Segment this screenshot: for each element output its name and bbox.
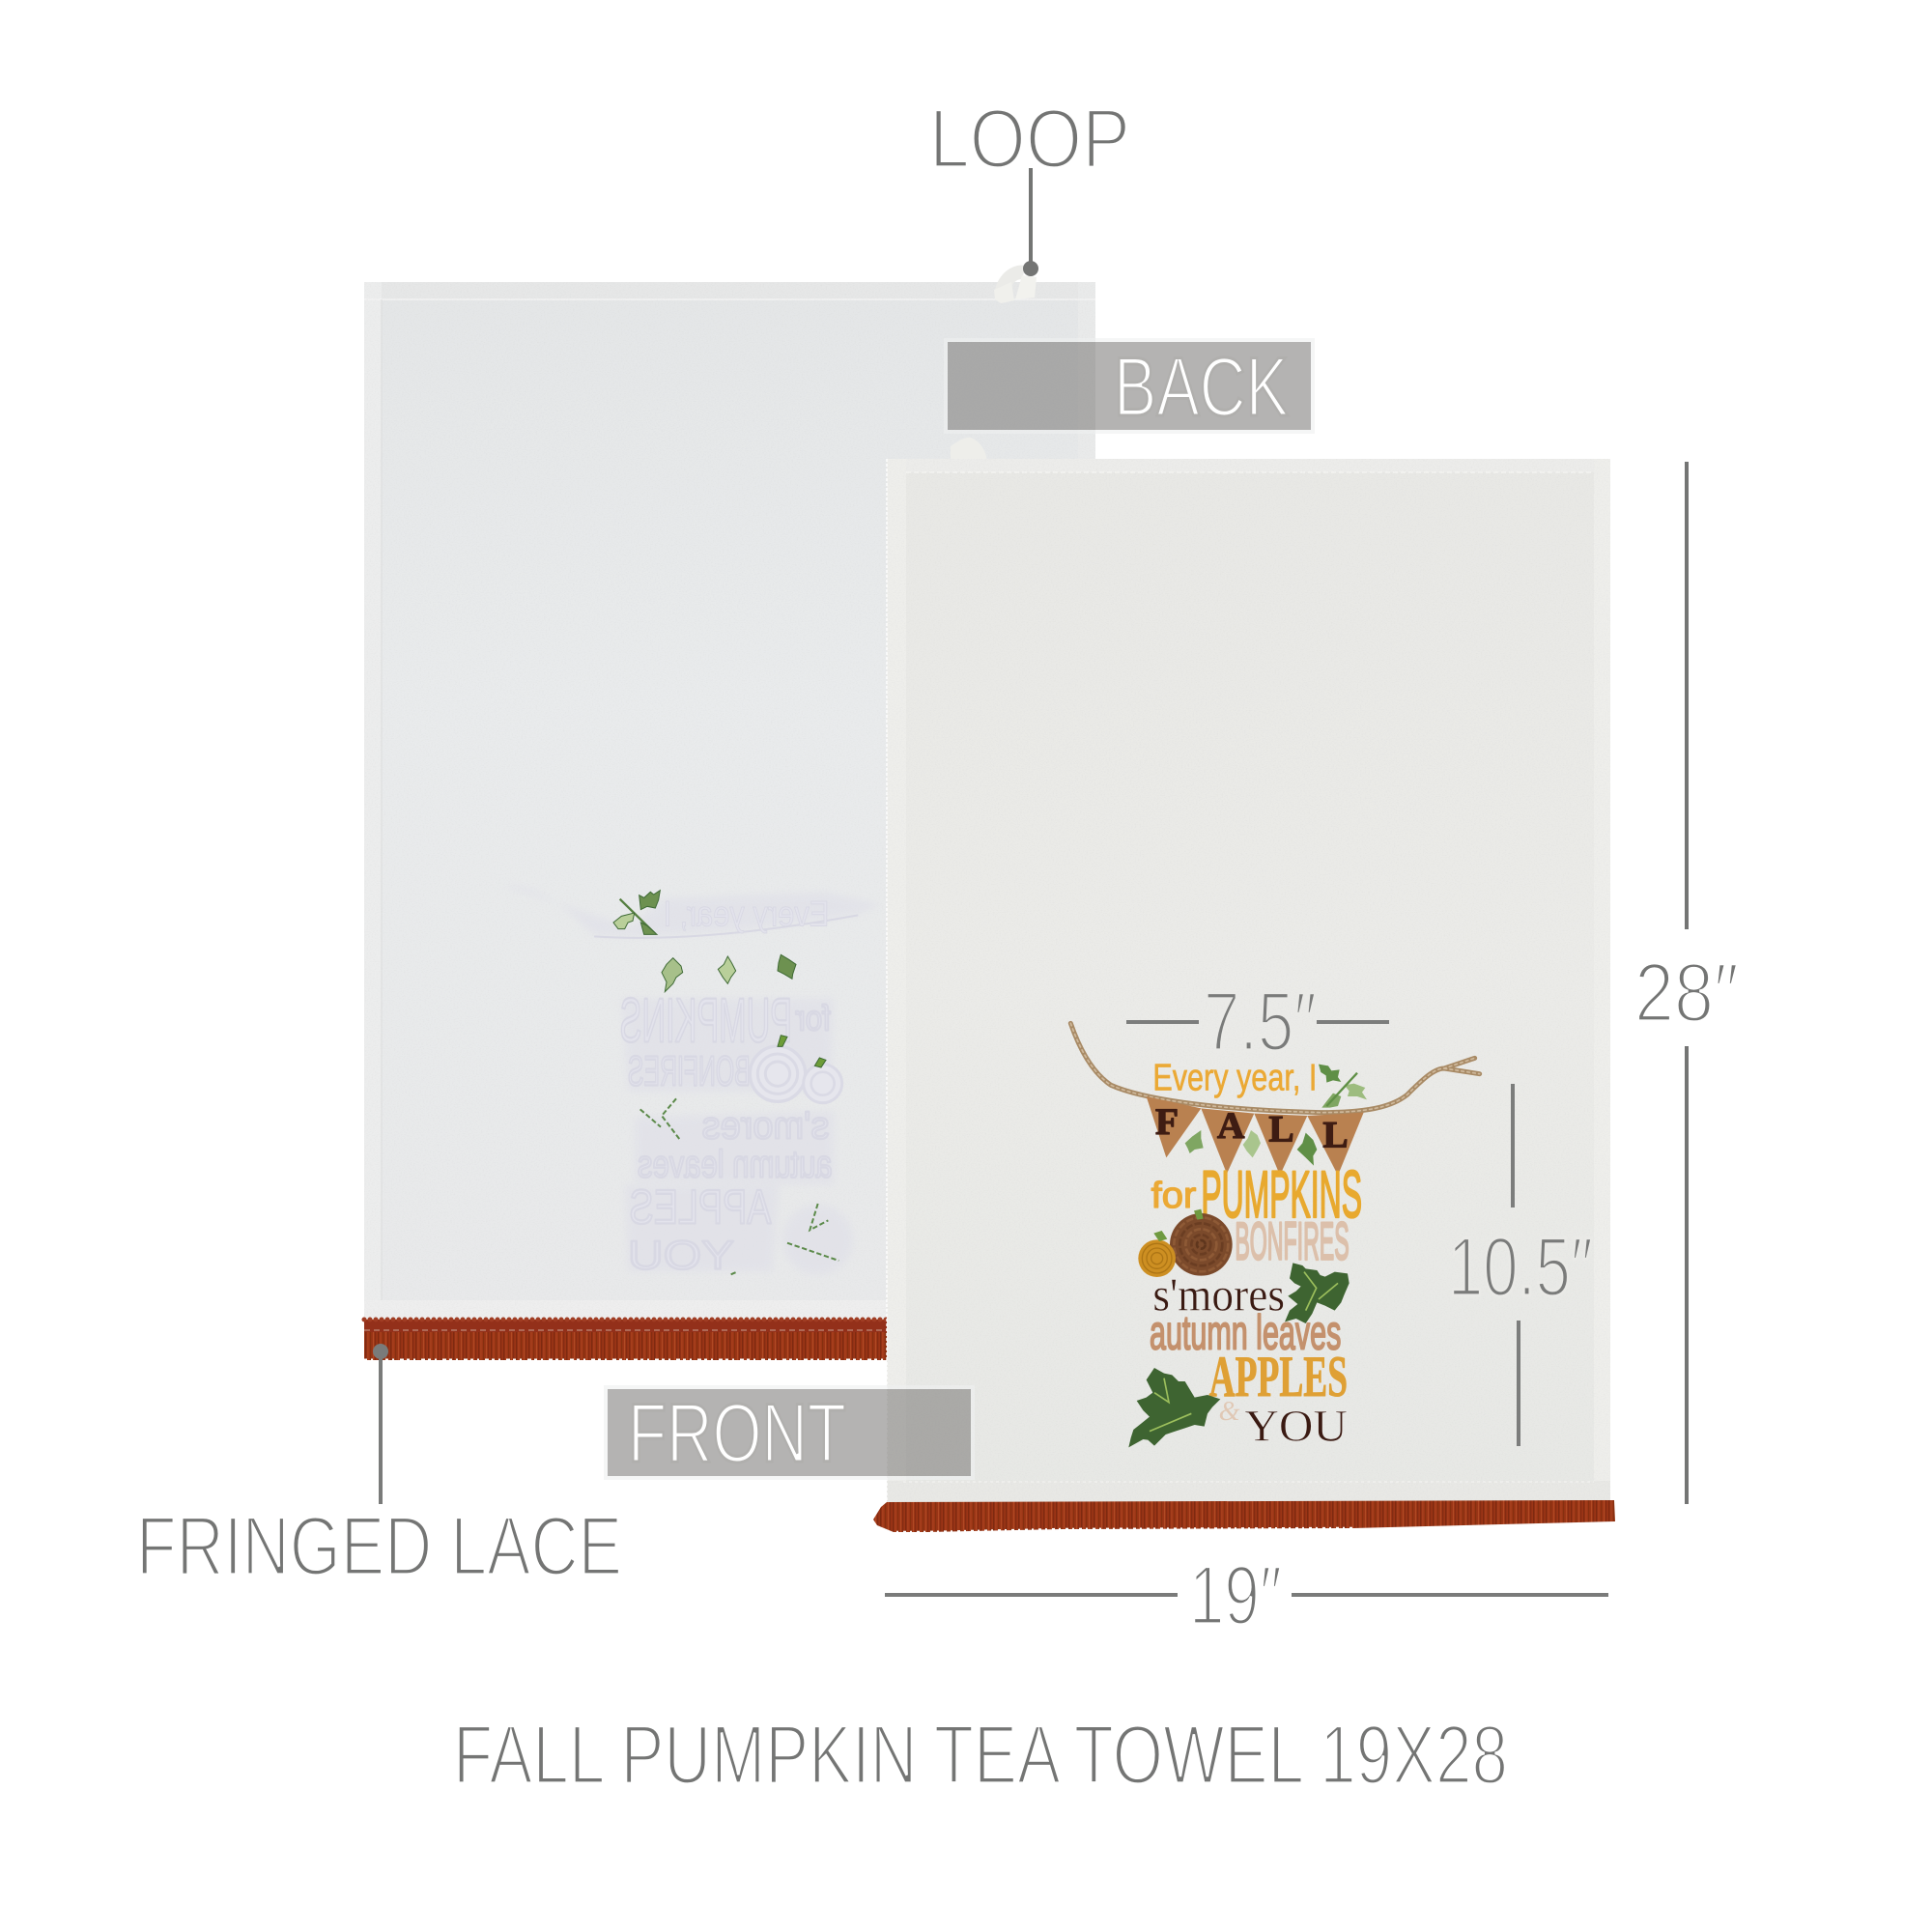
towel front cloth bbox=[887, 459, 1610, 1502]
large brown pumpkin bbox=[1170, 1209, 1233, 1276]
leader line and dot bbox=[1023, 168, 1038, 276]
text: autumn leaves: autumn leaves bbox=[1150, 1306, 1341, 1360]
label LOOP: LOOP bbox=[929, 93, 1130, 185]
text: Every year, I: Every year, I bbox=[1152, 1056, 1317, 1098]
text: YOU: YOU bbox=[1244, 1402, 1348, 1452]
mirrored stitched words bbox=[620, 893, 833, 1277]
callout: loop bbox=[929, 93, 1130, 276]
mirrored stitched words: APPLES bbox=[630, 1180, 771, 1235]
mirrored stitched words: Every year, I bbox=[664, 893, 829, 933]
front loop bbox=[951, 438, 987, 461]
text: for: for bbox=[1151, 1175, 1197, 1216]
mirrored stitched words: YOU bbox=[628, 1232, 734, 1277]
embroidery design: PUMPKINS bbox=[1201, 1158, 1362, 1232]
maple leaf upper bbox=[1285, 1263, 1350, 1323]
green stitched veins bbox=[640, 1098, 838, 1274]
text: ampersand: & bbox=[1219, 1397, 1240, 1427]
label 7.5: 7.5″ bbox=[1204, 976, 1317, 1068]
bunting letters FALL bbox=[1155, 1100, 1349, 1156]
callout: fringed lace bbox=[136, 1344, 622, 1593]
mirrored stitched words: for bbox=[795, 999, 831, 1038]
dimension: towel width 19 bbox=[885, 1549, 1608, 1642]
mirrored cord stitching bbox=[594, 915, 858, 938]
linen texture on front cloth bbox=[887, 459, 1610, 1502]
text: s'mores: s'mores bbox=[1152, 1270, 1285, 1321]
mirrored stitched words: BONFIRES bbox=[628, 1048, 751, 1094]
front fringed lace bbox=[873, 1500, 1615, 1532]
FRONT label: FRONT bbox=[628, 1387, 846, 1480]
small orange pumpkin bbox=[1138, 1231, 1176, 1277]
linen texture on back cloth bbox=[364, 282, 1095, 1321]
leader line and dot bbox=[373, 1344, 388, 1504]
BACK label: BACK bbox=[1114, 341, 1289, 434]
mirrored stitched words: PUMPKINS bbox=[620, 984, 792, 1055]
sprig leaves bbox=[1185, 1065, 1367, 1166]
maple leaf lower bbox=[1128, 1368, 1220, 1447]
back towel hems bbox=[364, 282, 1095, 1321]
badge: FRONT bbox=[606, 1387, 973, 1480]
embroidery design bbox=[1070, 1023, 1480, 1452]
back loop bbox=[994, 265, 1037, 303]
title: FALL PUMPKIN TEA TOWEL 19X28 bbox=[453, 1709, 1508, 1802]
bunting letters FALL: A bbox=[1217, 1104, 1245, 1147]
embroidery design: BONFIRES bbox=[1235, 1210, 1350, 1270]
green stitched sprigs bbox=[613, 891, 826, 1067]
mirrored stitched words: autumn leaves bbox=[638, 1143, 833, 1185]
dimension: design height 10.5 bbox=[1448, 1084, 1593, 1446]
label 28: 28″ bbox=[1634, 947, 1739, 1039]
badge: BACK bbox=[946, 340, 1313, 434]
back fringed lace bbox=[364, 1320, 892, 1360]
jute bunting cord bbox=[1070, 1023, 1480, 1113]
label 19: 19″ bbox=[1189, 1549, 1282, 1642]
mirrored pumpkins bbox=[750, 1046, 842, 1103]
show-through embroidery on back bbox=[502, 885, 882, 1277]
panel: back towel bbox=[364, 282, 1095, 1321]
bunting flags bbox=[1147, 1096, 1364, 1176]
dimension: design width 7.5 bbox=[1126, 976, 1389, 1068]
stabiliser haze bbox=[502, 885, 882, 1275]
front towel hems bbox=[887, 459, 1610, 1502]
bunting letters FALL: L bbox=[1322, 1114, 1349, 1156]
bunting letters FALL: L bbox=[1268, 1107, 1294, 1150]
mirrored stitched words: s'mores bbox=[702, 1104, 829, 1147]
label FRINGED LACE: FRINGED LACE bbox=[136, 1500, 622, 1593]
panel: front towel bbox=[873, 438, 1615, 1532]
dimension: towel height 28 bbox=[1634, 462, 1739, 1504]
text: APPLES: APPLES bbox=[1209, 1345, 1348, 1408]
label 10.5: 10.5″ bbox=[1448, 1221, 1593, 1314]
towel back cloth bbox=[364, 282, 1095, 1321]
bunting letters FALL: F bbox=[1155, 1100, 1179, 1143]
